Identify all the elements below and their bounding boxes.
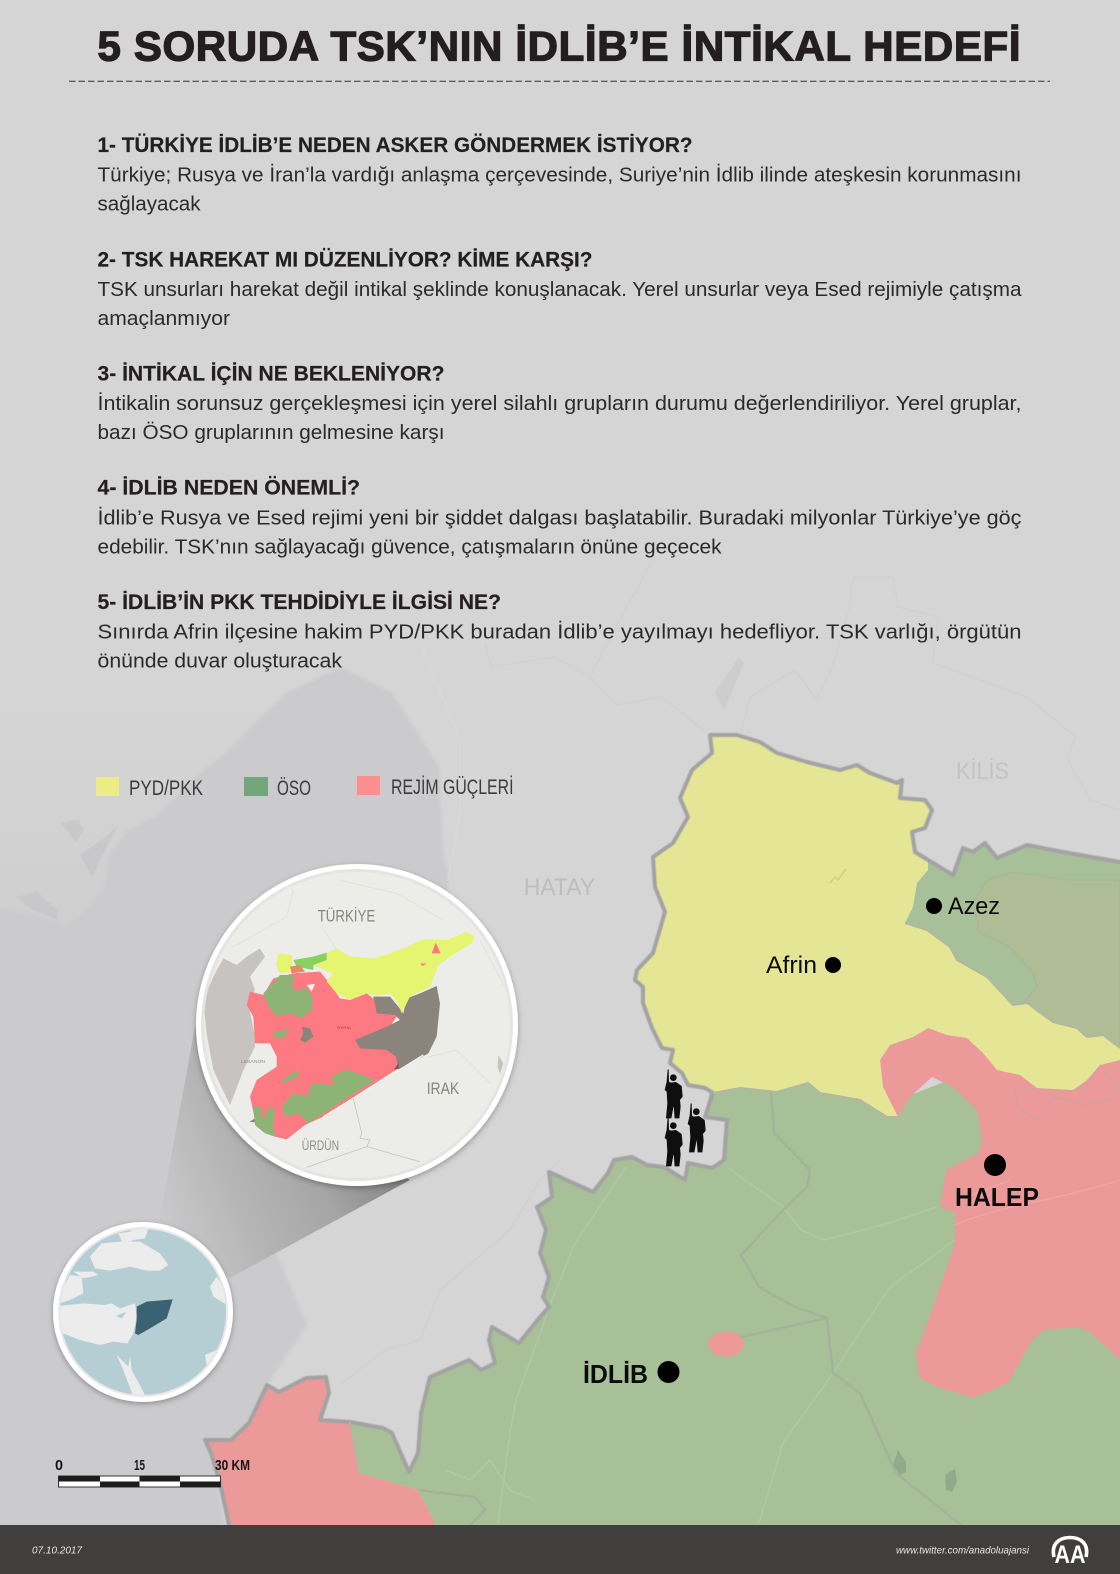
light terrain line along gulf [448, 876, 449, 880]
orange contested strip [290, 965, 305, 973]
sea [203, 948, 265, 1105]
scale bar: 0 [55, 1457, 63, 1474]
question 3: 3- İNTİKAL İÇİN NE BEKLENİYOR? [98, 362, 444, 386]
footer link: www.twitter.com/anadoluajansi [896, 1546, 1030, 1556]
question 3 [98, 362, 1022, 444]
faint borders [233, 880, 517, 1083]
question 3: bazı ÖSO gruplarının gelmesine karşı [98, 421, 445, 444]
region: SW regime red area [205, 1377, 436, 1525]
small lakes [893, 1450, 957, 1492]
question 5: Sınırda Afrin ilçesine hakim PYD/PKK buradan İdlib’e yayılmayı hedefliyor. TSK varlığı, örgütün [98, 621, 1022, 644]
green: opposition [253, 975, 375, 1137]
map place label: KİLİS: KİLİS [956, 758, 1009, 785]
inset label: IRAK: IRAK [427, 1079, 460, 1098]
city: İdlib: İDLİB [583, 1359, 648, 1389]
question 1 [98, 132, 1021, 216]
roads [445, 1167, 955, 1523]
legend: ÖSO: ÖSO [277, 777, 311, 800]
question 4: İdlib’e Rusya ve Esed rejimi yeni bir şiddet dalgası başlatabilir. Buradaki milyonlar Türkiye’ye göç [98, 506, 1022, 529]
question 3: İntikalin sorunsuz gerçekleşmesi için yerel silahlı grupların durumu değerlendiriliyor. Yerel gruplar, [98, 392, 1022, 415]
bright green strip [293, 953, 327, 970]
internal borders [418, 1092, 961, 1525]
soldier 3 [665, 1117, 683, 1166]
map place label: HATAY: HATAY [524, 874, 595, 901]
region: regime red area around Aleppo [880, 1028, 1120, 1398]
region: north-east ÖSO area near Azez [905, 843, 1120, 1060]
red pockets [420, 943, 441, 966]
Turkey border line [205, 735, 1120, 1525]
legend: Rejim Güçleri: REJİM GÜÇLERİ [391, 776, 514, 799]
small dark mark [394, 1063, 398, 1070]
question 1: sağlayacak [98, 193, 201, 216]
city: Azez: Azez [948, 893, 1000, 920]
scale bar [55, 1457, 250, 1487]
grey: other control [355, 986, 440, 1070]
region: PYD/PKK yellow area Afrin [635, 735, 1120, 1117]
city: Afrin [766, 952, 841, 979]
legend: PYD/PKK: PYD/PKK [129, 777, 203, 800]
soft borders between regions [350, 923, 1120, 1473]
footer date: 07.10.2017 [32, 1546, 82, 1556]
question 4 [98, 475, 1022, 558]
scale bar: 30 KM [215, 1457, 250, 1474]
question 1: Türkiye; Rusya ve İran’la vardığı anlaşma çerçevesinde, Suriye’nin İdlib ilinde ateşkesin korunmasını [98, 164, 1021, 187]
lake north of the map [715, 657, 744, 710]
scale bar: 15 [134, 1457, 145, 1474]
caspian sliver [498, 1055, 503, 1074]
western delta land tint [0, 700, 260, 930]
locator map: Middle East [53, 1222, 233, 1402]
legend: Rejim Güçleri [357, 776, 514, 799]
inset label: ÜRDÜN: ÜRDÜN [302, 1136, 339, 1153]
region: ÖSO green area [350, 1060, 1120, 1525]
small river mark in Afrin [830, 869, 846, 883]
inset label: TÜRKİYE: TÜRKİYE [318, 907, 375, 926]
question 4: 4- İDLİB NEDEN ÖNEMLİ? [98, 475, 360, 500]
question 5: 5- İDLİB’İN PKK TEHDİDİYLE İLGİSİ NE? [98, 590, 501, 614]
logo: Anadolu Agency: AA [1054, 1541, 1086, 1569]
question 4: edebilir. TSK’nın sağlayacağı güvence, çatışmaların önüne geçecek [98, 535, 722, 558]
olive zone [973, 872, 1120, 1048]
question 2: amaçlanmıyor [98, 307, 230, 330]
city: Halep: HALEP [955, 1182, 1039, 1212]
inset label: SYRIA: SYRIA [337, 1025, 351, 1030]
red: regime [247, 972, 398, 1139]
yellow: PYD/PKK [313, 932, 474, 1013]
question 5: önünde duvar oluşturacak [98, 650, 343, 673]
question 2 [98, 246, 1022, 330]
question 1: 1- TÜRKİYE İDLİB’E NEDEN ASKER GÖNDERMEK İSTİYOR? [98, 132, 692, 157]
question 2: 2- TSK HAREKAT MI DÜZENLİYOR? KİME KARŞI? [98, 246, 592, 271]
Syria highlighted [135, 1299, 173, 1335]
sea: gulf and mediterranean [0, 668, 449, 1560]
southeast border highlight [323, 1055, 423, 1117]
footer bar [0, 1525, 1120, 1574]
inset map: Syria control map [196, 864, 518, 1186]
shadow cone between locator circles [159, 1027, 410, 1278]
inset label: LEBANON: LEBANON [241, 1059, 265, 1064]
inner red border [1015, 1065, 1120, 1120]
legend: ÖSO [244, 777, 311, 800]
coastal lagoons [62, 820, 116, 874]
title: 5 SORUDA TSK’NIN İDLİB’E İNTİKAL HEDEFİ [98, 22, 1020, 70]
question 5 [98, 590, 1022, 673]
icon: soldiers [665, 1069, 706, 1166]
small red pocket near Idlib [708, 1332, 744, 1356]
soldier 1 [665, 1069, 683, 1118]
faint red road lines [955, 1180, 1120, 1225]
soldier 2 [688, 1103, 706, 1152]
faint rivers and terrain lines [340, 557, 1120, 1385]
legend: PYD/PKK [96, 777, 203, 800]
question 2: TSK unsurları harekat değil intikal şeklinde konuşlanacak. Yerel unsurlar veya Esed rejimiyle çatışma [98, 278, 1022, 301]
legend [96, 776, 514, 800]
city: Azez [926, 893, 1000, 920]
white spot [307, 984, 315, 992]
city: Afrin: Afrin [766, 952, 817, 979]
map background [0, 670, 1120, 1525]
city: Halep [955, 1154, 1039, 1212]
Cyprus [116, 1312, 127, 1318]
